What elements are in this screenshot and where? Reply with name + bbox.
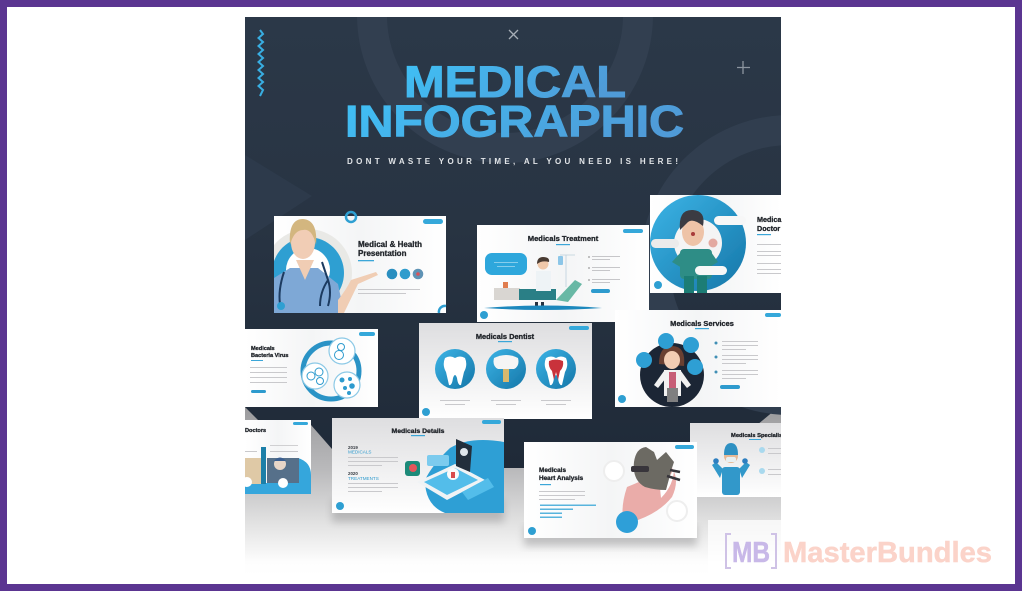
title: MEDICAL: [404, 58, 626, 107]
title: [345, 58, 684, 146]
panel: medicals dentist: Medicals Dentist: [476, 332, 535, 341]
panel: medicals doctors: Doctors: [245, 428, 266, 434]
panel: medicals treatment: [477, 225, 649, 322]
panel: medicals doctor: Doctor: [757, 224, 780, 233]
panel: medicals specialist: [690, 423, 784, 497]
zigzag decoration: [258, 30, 263, 96]
watermark: MasterBundles: MB: [732, 537, 770, 569]
panel: medicals details: [332, 418, 504, 513]
panel: medicals heart analysis: [524, 442, 697, 538]
panel: medicals bacteria virus: Bacteria Virus: [251, 353, 289, 359]
panel: medicals bacteria virus: Medicals: [251, 346, 275, 352]
panel: medicals details: 2020: [348, 471, 358, 476]
subtitle: DONT WASTE YOUR TIME, AL YOU NEED IS HERE!: [347, 157, 678, 166]
poster background: [245, 17, 781, 553]
panel: medicals doctors: [242, 420, 311, 494]
panel: medicals bacteria virus: [245, 329, 378, 407]
panel: medicals details: TREATMENTS: [348, 476, 379, 481]
panel: medicals specialist: Medicals Specialist: [731, 433, 784, 439]
panel: medicals details: MEDICALS: [348, 450, 372, 454]
panel: medical and health presentation: Medical & Health: [358, 240, 422, 249]
panel: medicals heart analysis: Heart Analysis: [539, 475, 584, 482]
panel: medicals treatment: Medicals Treatment: [528, 234, 599, 243]
panel: medicals services: [615, 310, 781, 407]
watermark logo panel: [708, 520, 781, 575]
panel: medicals services: Medicals Services: [670, 319, 734, 328]
panel: medicals dentist: [419, 323, 592, 419]
panel: medicals details: 2019: [348, 445, 358, 450]
panel: medicals doctor: Medica: [757, 215, 782, 224]
plus mark: [737, 61, 750, 74]
cross mark: [509, 30, 518, 39]
panel: medicals heart analysis: Medicals: [539, 467, 566, 474]
panel: medicals details: Medicals Details: [392, 428, 445, 435]
panel: medical and health presentation: Presentation: [358, 249, 407, 258]
title: INFOGRAPHIC: [345, 98, 684, 146]
panel: medicals doctor: [650, 195, 782, 296]
watermark: MasterBundles: MasterBundles: [783, 537, 992, 569]
panel: medical and health presentation: [264, 212, 446, 317]
